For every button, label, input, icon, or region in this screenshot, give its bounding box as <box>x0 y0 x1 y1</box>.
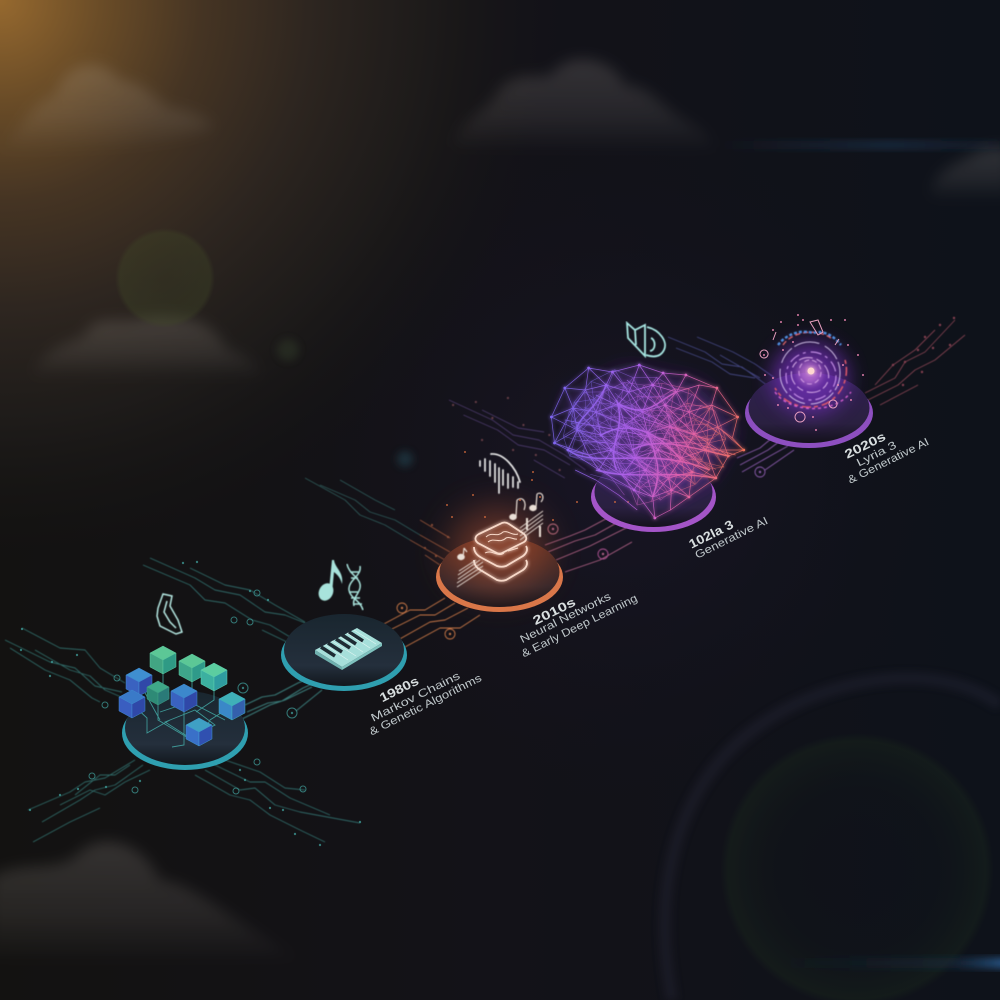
cube blue <box>171 684 197 712</box>
icon: DNA helix <box>347 564 363 610</box>
trace nodes: node 1 <box>21 562 360 845</box>
label: 2010s: 2010s <box>531 595 578 628</box>
label: 2020s: 2020s <box>842 429 888 462</box>
circuit traces: node 3 to node 4 <box>545 514 632 572</box>
circuit traces: node 3 <box>305 478 450 565</box>
orb: sparks <box>764 315 863 430</box>
platform 1 <box>122 691 248 770</box>
mesh: main lines <box>551 365 744 518</box>
mesh: rotated layer three <box>555 367 730 515</box>
swirl orb <box>760 315 863 430</box>
label text: Markov Chains: Markov Chains <box>369 670 463 725</box>
icon: waveform <box>480 454 520 493</box>
cloud: top left <box>0 65 215 153</box>
label: 2010s <box>518 590 640 660</box>
mesh: haze <box>565 370 736 505</box>
flare: upper streak <box>720 141 1000 149</box>
label: 1980s <box>367 670 484 738</box>
cube green <box>150 646 176 674</box>
cube blue <box>186 718 212 746</box>
lens: small disc <box>115 228 215 328</box>
orb: glow <box>772 342 848 414</box>
circuit traces: node 2 to node 3 <box>382 598 480 647</box>
cloud: mid left <box>30 317 265 378</box>
icon: block cubes <box>119 646 245 746</box>
icon: wire frame under cubes <box>132 660 232 747</box>
label: generative AI node <box>687 515 770 562</box>
lens flare <box>115 141 1000 1000</box>
brain network mesh <box>551 360 744 522</box>
icon: stacked layers <box>474 522 527 581</box>
cube blue <box>126 668 152 696</box>
orb: small glyphs <box>760 320 839 422</box>
orb: core <box>798 361 822 385</box>
label text: Lyria 3: Lyria 3 <box>855 439 899 469</box>
speaker icon <box>627 323 665 356</box>
label text: Early Deep Learning: & Early Deep Learning <box>520 592 640 660</box>
circuit traces: node 1 <box>5 558 360 842</box>
cube dark green <box>147 681 169 705</box>
icon: music notes and staff <box>457 493 543 587</box>
icon: outline shape <box>157 594 182 634</box>
platform 4 <box>591 457 716 532</box>
circuit traces: node 4 <box>449 398 586 478</box>
icon: piano keyboard <box>315 628 382 670</box>
particles: orange <box>447 452 628 520</box>
circuit traces: node 4 to node 5 <box>737 438 794 477</box>
cloud: top centre <box>452 59 716 152</box>
cube blue <box>119 690 145 718</box>
circuit traces: node 5 <box>668 318 965 405</box>
label: generative AI node: 102la 3 <box>687 517 736 551</box>
icon: music note <box>316 560 342 603</box>
label text: Genetic Algorithms: & Genetic Algorithms <box>367 672 484 738</box>
cloud: bottom left <box>0 842 305 962</box>
cloud: right <box>930 148 1000 200</box>
label: 2020s <box>842 429 931 487</box>
glow: orange node <box>450 508 546 592</box>
cube teal <box>201 663 227 691</box>
label text: Generative AI: & Generative AI <box>846 436 931 487</box>
lens: dot <box>397 451 413 467</box>
platform 2 <box>281 614 407 691</box>
lens: large disc <box>720 733 994 1000</box>
cube teal blue <box>219 692 245 720</box>
mesh: nodes <box>551 365 744 518</box>
label text: Generative AI: Generative AI <box>693 515 770 562</box>
cube green <box>179 654 205 682</box>
label: 1980s: 1980s <box>377 674 421 705</box>
platform 3 <box>436 537 563 612</box>
orb: rings <box>775 332 851 409</box>
platform 5 <box>745 373 873 448</box>
flare: lower streak <box>780 958 1000 968</box>
lens: ring <box>665 678 1000 1000</box>
mesh: rotated layer two <box>553 360 742 522</box>
mesh: bright strands <box>568 385 728 497</box>
lens: small dot <box>277 339 299 361</box>
label text: Neural Networks: Neural Networks <box>518 590 614 646</box>
